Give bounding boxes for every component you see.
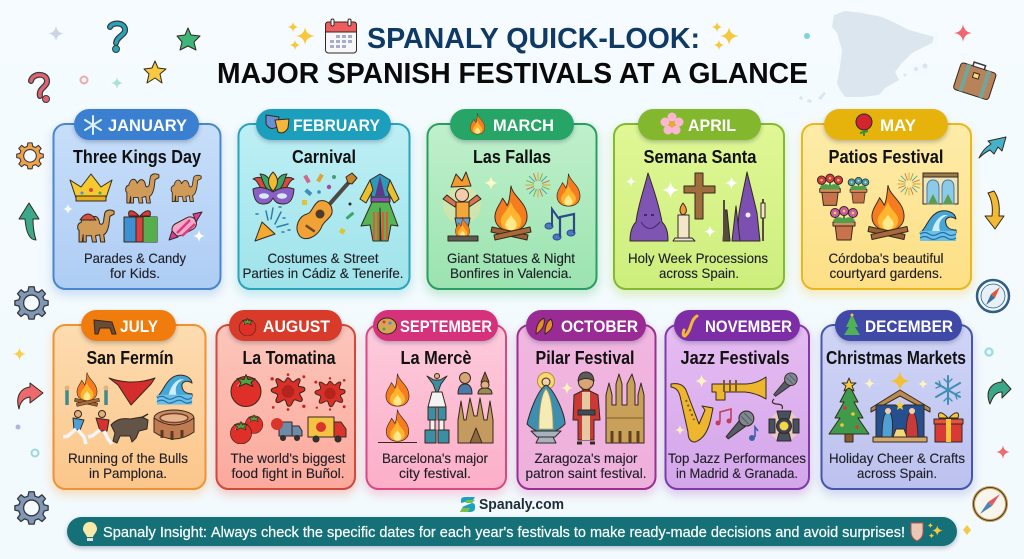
month pill: [835, 310, 962, 341]
description: [84, 250, 186, 281]
icons: mask, confetti, guitar, costume, popper: [253, 172, 399, 241]
description: Giant Statues & Night: [447, 250, 575, 266]
panel: December: [822, 310, 972, 489]
icons: Virgin of Pilar, baturro man, basilica: [527, 372, 644, 443]
panel: July: [54, 310, 206, 489]
panel: May: [802, 109, 971, 289]
description: Parades & Candy: [84, 250, 186, 266]
description: The world's biggest: [230, 450, 346, 466]
month pill: DECEMBER: [865, 317, 953, 336]
title line 2: MAJOR SPANISH FESTIVALS AT A GLANCE: [217, 58, 808, 90]
month pill: [229, 310, 342, 341]
logo: Spanaly.com: Spanaly.com: [479, 496, 564, 513]
month pill: [450, 109, 574, 140]
description: in Madrid & Granada.: [676, 465, 798, 481]
month pill: MARCH: [493, 116, 554, 135]
title icon: calendar: [326, 19, 356, 53]
heading: Christmas Markets: [826, 348, 966, 368]
callout: Spanaly Insight: [67, 517, 957, 546]
description: [526, 450, 646, 481]
panel: September: [366, 310, 506, 489]
description: for Kids.: [110, 265, 160, 281]
heading: Las Fallas: [473, 147, 551, 167]
panel: November: [666, 310, 809, 489]
description: Holiday Cheer & Crafts: [829, 450, 965, 466]
panel: February: [238, 109, 410, 289]
month pill: JANUARY: [108, 116, 188, 135]
description: Córdoba's beautiful: [828, 250, 944, 266]
month pill: JULY: [120, 317, 159, 336]
insight text: Spanaly Insight:: [103, 524, 207, 541]
icon: sparkles: [928, 523, 943, 538]
month pill: [638, 109, 761, 140]
description: food fight in Buñol.: [232, 465, 344, 481]
card background: [518, 325, 656, 489]
icon: shield: [911, 523, 923, 541]
month pill: NOVEMBER: [705, 317, 792, 336]
card background: [666, 325, 809, 489]
panel: January: [54, 109, 220, 289]
month pill: [81, 310, 176, 341]
icon: light bulb: [83, 522, 97, 541]
description: Holy Week Processions: [628, 250, 768, 266]
month pill: APRIL: [688, 116, 736, 135]
icons: ninot, bonfire, fireworks, flame, notes: [443, 172, 580, 241]
month pill: [373, 310, 498, 341]
icons: flower pots, fireworks, arch, bonfire, wave: [817, 173, 958, 241]
card background: [822, 325, 972, 489]
month pill: MAY: [880, 116, 917, 135]
description: [447, 250, 575, 281]
card background: [428, 124, 596, 289]
icons: hooded nazareno, cross, candle, procession: [626, 172, 765, 241]
icons: tomatoes, splats, trucks: [230, 373, 346, 444]
description: across Spain.: [857, 465, 937, 481]
description: [828, 250, 944, 281]
description: [382, 450, 488, 481]
panel: April: [614, 109, 784, 289]
card background: [366, 325, 506, 489]
month pill: [674, 310, 800, 341]
card background: [216, 325, 355, 489]
panel: March: [428, 109, 596, 289]
card background: [614, 124, 784, 289]
decor: right doodles: [804, 24, 1011, 535]
title icon: sparkles right: [712, 22, 739, 50]
month pill: [824, 109, 948, 140]
icons: crown, camels, gift, candy: [63, 174, 205, 242]
month pill: [526, 310, 646, 341]
description: patron saint festival.: [526, 465, 646, 481]
panel: August: [216, 310, 355, 489]
icons: bonfire, neckerchief, wave, runners, bull, arena: [63, 373, 194, 444]
month pill: [256, 109, 391, 140]
heading: San Fermín: [86, 348, 174, 368]
month pill: [74, 109, 199, 140]
description: [628, 250, 768, 281]
card background: [238, 124, 410, 289]
description: Running of the Bulls: [68, 450, 188, 466]
month pill: OCTOBER: [561, 317, 638, 336]
description: in Pamplona.: [89, 465, 167, 481]
description: Costumes & Street: [268, 250, 379, 266]
month pill: AUGUST: [263, 317, 331, 336]
heading: Pilar Festival: [536, 348, 634, 368]
icons: fire, castell, heads, Sagrada Familia: [378, 372, 493, 443]
description: Bonfires in Valencia.: [450, 265, 572, 281]
description: [829, 450, 965, 481]
month pill: SEPTEMBER: [400, 317, 492, 336]
title line 1: SPANALY QUICK-LOOK:: [367, 23, 700, 55]
card background: [54, 124, 220, 289]
insight text: Always check the specific dates for each year's festivals to make ready-made decisions and avoid surprises!: [211, 524, 905, 541]
heading: Semana Santa: [644, 147, 757, 167]
heading: Patios Festival: [828, 147, 944, 167]
title icon: sparkles left: [288, 22, 315, 50]
card background: [802, 124, 971, 289]
decor: Spain map: [799, 11, 934, 103]
description: Parties in Cádiz & Tenerife.: [242, 265, 404, 281]
description: city festival.: [399, 465, 471, 481]
description: [242, 250, 404, 281]
title: [217, 19, 808, 90]
description: courtyard gardens.: [830, 265, 942, 281]
heading: Three Kings Day: [73, 147, 201, 167]
panel: October: [518, 310, 656, 489]
heading: La Tomatina: [242, 348, 336, 368]
card background: [54, 325, 206, 489]
heading: Jazz Festivals: [680, 348, 790, 368]
decor: left doodles: [13, 23, 200, 524]
heading: La Mercè: [400, 348, 472, 368]
description: Zaragoza's major: [534, 450, 638, 466]
heading: Carnival: [292, 147, 356, 167]
month pill: FEBRUARY: [293, 116, 381, 135]
description: Top Jazz Performances: [668, 450, 806, 466]
icons: saxophone, trumpet, microphones, notes, spotlight: [671, 373, 799, 442]
description: [230, 450, 346, 481]
description: Barcelona's major: [382, 450, 488, 466]
description: [68, 450, 188, 481]
icons: tree, nativity, snowflake, gift: [829, 371, 963, 442]
description: [668, 450, 806, 481]
description: across Spain.: [659, 265, 739, 281]
